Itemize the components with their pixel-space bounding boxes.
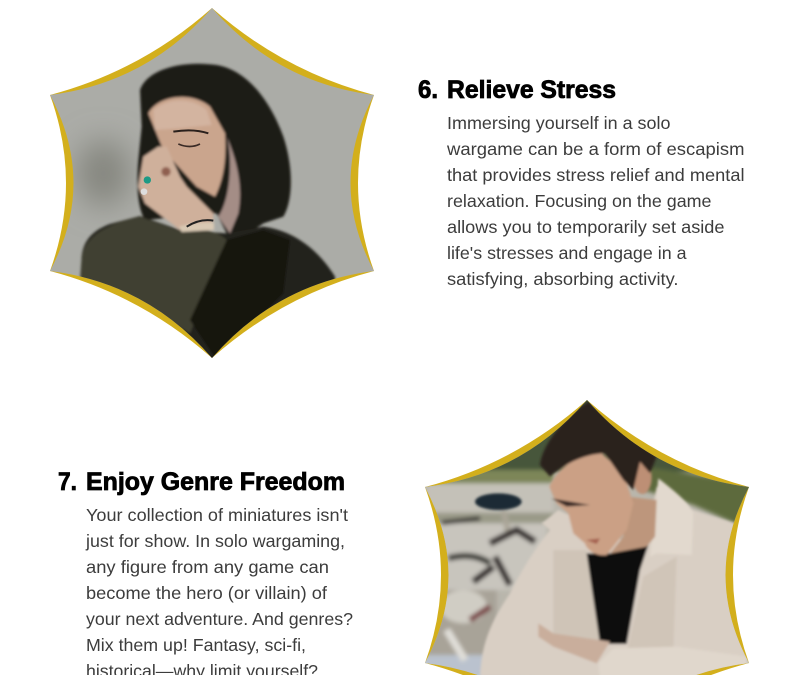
text block: relieve stress description: Immersing yourself in a solo xyxy=(447,113,670,133)
heading: 7. Enjoy Genre Freedom: 7. xyxy=(58,468,77,496)
heading: 7. Enjoy Genre Freedom: Enjoy Genre Freedom xyxy=(86,468,345,496)
text block: relieve stress description xyxy=(446,113,744,289)
text block: relieve stress description: that provides stress relief and mental xyxy=(447,165,744,185)
text block: relieve stress description: relaxation. Focusing on the game xyxy=(447,191,712,211)
text block: genre freedom description xyxy=(85,505,353,675)
photo: woman covering her face xyxy=(47,0,380,367)
heading: 6. Relieve Stress: 6. xyxy=(418,76,438,104)
text block: genre freedom description: just for show. In solo wargaming, xyxy=(85,531,345,551)
text block: genre freedom description: Mix them up! Fantasy, sci-fi, xyxy=(86,635,306,655)
text block: relieve stress description: life's stresses and engage in a xyxy=(447,243,687,263)
heading: 6. Relieve Stress: Relieve Stress xyxy=(447,76,616,104)
text block: genre freedom description: Your collection of miniatures isn't xyxy=(86,505,348,525)
text block: relieve stress description: wargame can be a form of escapism xyxy=(446,139,744,159)
panel: relieve stress photo xyxy=(47,0,380,367)
text block: relieve stress description: satisfying, absorbing activity. xyxy=(447,269,678,289)
panel: genre freedom photo xyxy=(420,390,757,675)
gold star frame xyxy=(50,8,374,358)
text block: genre freedom description: your next adventure. And genres? xyxy=(86,609,353,629)
text block: genre freedom description: any figure from any game can xyxy=(86,557,329,577)
gold star frame xyxy=(425,400,749,675)
photo: man with bicycle behind him xyxy=(420,390,757,675)
text block: genre freedom description: become the hero (or villain) of xyxy=(86,583,327,603)
text block: relieve stress description: allows you to temporarily set aside xyxy=(447,217,724,237)
